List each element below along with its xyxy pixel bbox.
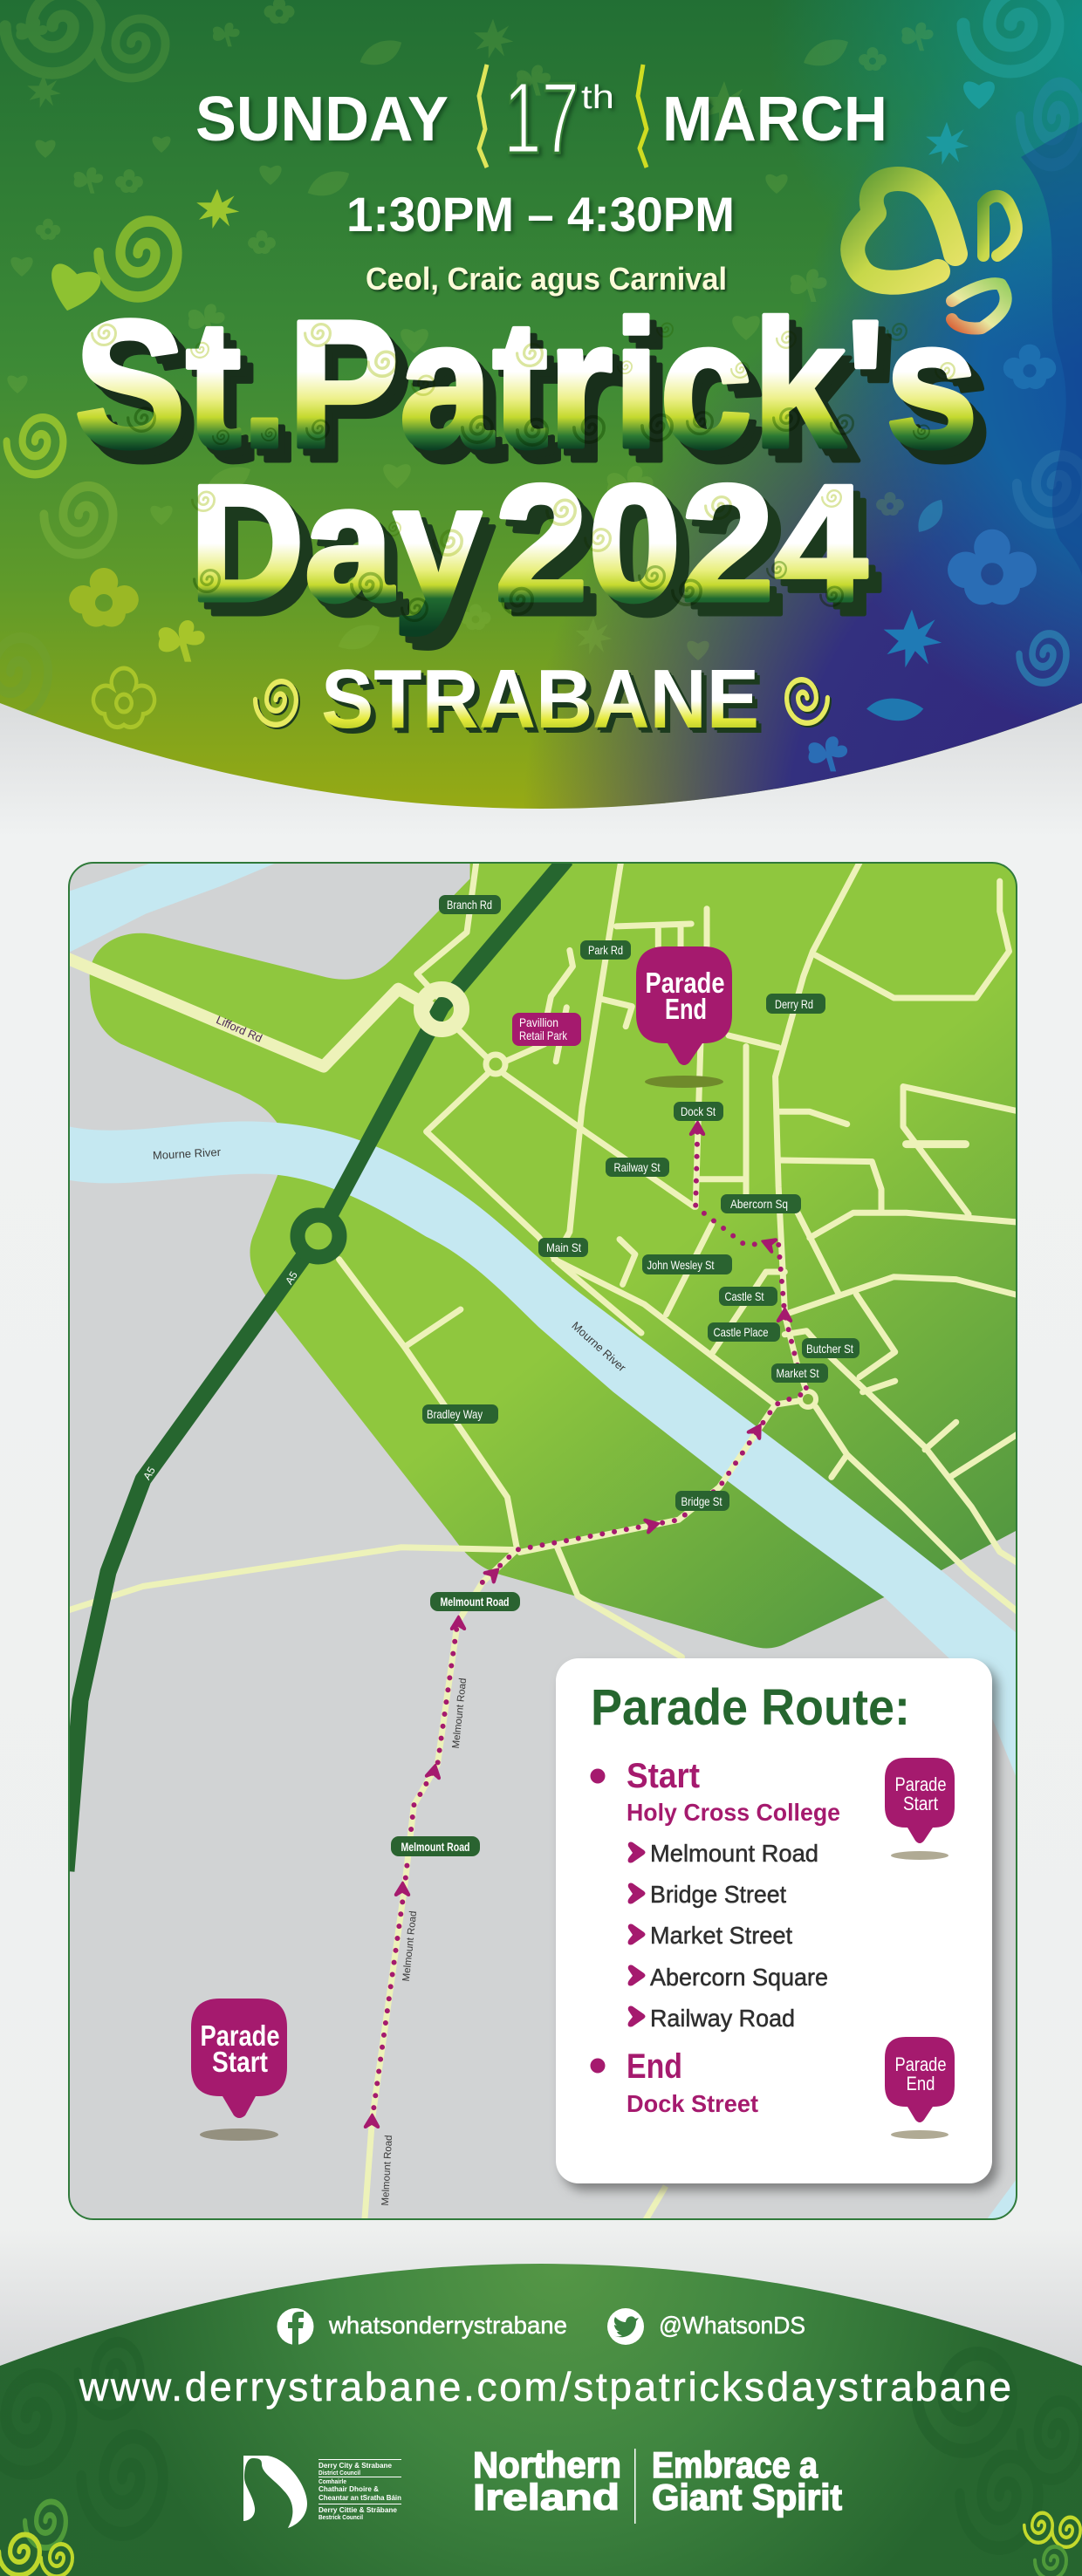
logo: Derry City and Strabane District Council: Comhairle bbox=[318, 2479, 346, 2485]
title: Strabane: STRABANE bbox=[321, 653, 759, 746]
Melmount Road labels: Melmount Road bbox=[451, 1677, 469, 1749]
faint festive pattern bbox=[5, 0, 934, 660]
logo: Northern Ireland: Ireland bbox=[473, 2477, 620, 2518]
website url: www.derrystrabane.com/stpatricksdaystrabane bbox=[79, 2364, 1011, 2409]
icon: twitter bbox=[607, 2308, 644, 2345]
swirls on title letters, lower green bbox=[128, 408, 929, 620]
title: Day 2024: 2024 bbox=[495, 451, 867, 636]
Parade End pin bbox=[636, 946, 732, 1088]
street name tags: John Wesley St bbox=[647, 1258, 715, 1272]
street name tags: Butcher St bbox=[806, 1342, 853, 1356]
parade route dotted line bbox=[372, 1131, 808, 2120]
street name tags: Castle St bbox=[724, 1289, 764, 1303]
Melmount Road labels bbox=[380, 1677, 469, 2206]
dark footer swirls bbox=[911, 2388, 926, 2429]
river labels: Mourne River bbox=[153, 1145, 222, 1162]
logo: Derry City and Strabane District Council bbox=[243, 2456, 401, 2528]
title: St. Patrick's: St.Patrick's bbox=[74, 284, 978, 486]
Pavillion Retail Park tag: Retail Park bbox=[519, 1028, 568, 1042]
route stops list: Railway Road bbox=[650, 2005, 795, 2032]
facebook handle: whatsonderrystrabane bbox=[328, 2312, 567, 2339]
decorative swirls and flowers bbox=[0, 0, 1082, 771]
legend pin: end: Parade bbox=[895, 2053, 946, 2075]
route stops list: Abercorn Square bbox=[650, 1964, 828, 1991]
Parade Start pin bbox=[191, 1999, 287, 2141]
route stops list: Market Street bbox=[650, 1922, 792, 1949]
street name tags: Abercorn Sq bbox=[730, 1197, 788, 1211]
start entry bbox=[590, 1757, 840, 1826]
Parade Start pin: Start bbox=[212, 2046, 268, 2078]
swirls on title letters, upper pale bbox=[92, 323, 955, 555]
logo: Embrace a Giant Spirit: Embrace a bbox=[652, 2444, 818, 2485]
zigzag divider left bbox=[479, 65, 487, 167]
logo: Derry City and Strabane District Council: Chathair Dhoire & bbox=[318, 2485, 379, 2493]
street name tags: Melmount Road bbox=[401, 1840, 469, 1854]
street name tags: Dock St bbox=[681, 1104, 716, 1118]
footer banner bbox=[0, 2264, 1082, 2576]
Pavillion Retail Park tag: Pavillion bbox=[519, 1015, 558, 1029]
date line: Sunday 17th March: MARCH bbox=[662, 85, 887, 154]
title: Day 2024: Day bbox=[189, 451, 482, 636]
route stops list: Bridge Street bbox=[650, 1881, 786, 1908]
end entry bbox=[590, 2047, 758, 2117]
A5 labels bbox=[140, 1269, 300, 1482]
street name tags: Melmount Road bbox=[440, 1595, 510, 1609]
legend heading: Parade Route: bbox=[591, 1679, 910, 1736]
logo: Embrace a Giant Spirit: Giant Spirit bbox=[652, 2477, 842, 2518]
Parade Start pin: Parade bbox=[201, 2019, 279, 2052]
end entry: Dock Street bbox=[627, 2090, 758, 2117]
logo: Northern Ireland: Northern bbox=[473, 2444, 621, 2485]
street name tags: Branch Rd bbox=[447, 898, 492, 912]
header banner bbox=[0, 0, 1082, 809]
legend pin: end: End bbox=[906, 2073, 935, 2094]
land and river areas bbox=[65, 863, 1024, 1798]
street name tags: Bradley Way bbox=[427, 1407, 483, 1421]
legend pin: start: Start bbox=[903, 1793, 938, 1814]
roundabout: Pavillion bbox=[486, 1055, 505, 1074]
end entry: End bbox=[627, 2047, 682, 2086]
swirl right of Strabane bbox=[787, 680, 827, 723]
street name tags: Main St bbox=[546, 1240, 581, 1254]
swirl left of Strabane bbox=[256, 681, 296, 725]
panel: parade route legend bbox=[556, 1658, 992, 2183]
legend pin: start: Parade bbox=[895, 1773, 946, 1795]
street name tags: Railway St bbox=[614, 1160, 661, 1174]
date line: Sunday 17th March: SUNDAY bbox=[195, 85, 449, 154]
date line: Sunday 17th March bbox=[195, 61, 887, 174]
river labels bbox=[153, 1145, 629, 1375]
heart butterfly bbox=[853, 179, 1017, 329]
date line: Sunday 17th March: 17 bbox=[503, 61, 579, 174]
tagline: Ceol, Craic agus Carnival bbox=[366, 261, 727, 297]
logo: Derry City and Strabane District Council: Derry Cittie & Strābane bbox=[318, 2506, 398, 2514]
panel: route map bbox=[65, 859, 1024, 2229]
map frame bbox=[69, 863, 1017, 2219]
Melmount Road labels: Melmount Road bbox=[380, 2135, 394, 2206]
zigzag divider right bbox=[638, 65, 647, 167]
street name tags: Park Rd bbox=[588, 943, 623, 957]
street name tags: Derry Rd bbox=[775, 997, 813, 1011]
twitter handle: @WhatsonDS bbox=[659, 2312, 805, 2339]
A5 labels: A5 bbox=[140, 1465, 158, 1482]
legend pin: end bbox=[885, 2037, 955, 2139]
logo: Derry City and Strabane District Council: Bestrick Council bbox=[318, 2515, 363, 2521]
time: 1:30PM – 4:30PM bbox=[346, 187, 735, 242]
route direction arrows bbox=[364, 1120, 792, 2128]
logo: Embrace a Giant Spirit bbox=[652, 2444, 842, 2518]
river labels: Mourne River bbox=[569, 1319, 629, 1375]
start entry: Holy Cross College bbox=[627, 1799, 840, 1826]
icon: facebook bbox=[277, 2308, 314, 2345]
Parade End pin: Parade bbox=[646, 967, 724, 999]
street name tags: Market St bbox=[777, 1366, 819, 1380]
route stops list bbox=[628, 1840, 828, 2032]
roundabout: Lifford bbox=[421, 989, 462, 1029]
legend pin: start bbox=[885, 1758, 955, 1860]
Parade End pin: End bbox=[665, 993, 707, 1025]
logo: Northern Ireland bbox=[473, 2444, 621, 2518]
logo: Derry City and Strabane District Council: District Council bbox=[318, 2470, 360, 2477]
street name tags bbox=[391, 895, 859, 1856]
A5 labels: A5 bbox=[283, 1269, 300, 1287]
street name tags: Castle Place bbox=[714, 1325, 769, 1339]
road labels on map: Lifford Rd bbox=[215, 1013, 264, 1045]
roundabout: Market St bbox=[800, 1391, 816, 1407]
logo: Derry City and Strabane District Council: Cheantar an tSratha Báin bbox=[318, 2494, 401, 2502]
road network bbox=[65, 863, 1024, 2229]
A5 dual carriageway bbox=[66, 859, 566, 1871]
route stops list: Melmount Road bbox=[650, 1840, 818, 1867]
Melmount Road labels: Melmount Road bbox=[401, 1910, 419, 1982]
Pavillion Retail Park tag bbox=[512, 1013, 581, 1046]
date line: Sunday 17th March: th bbox=[581, 79, 614, 116]
bright corner swirls bbox=[0, 2502, 1080, 2576]
street name tags: Bridge St bbox=[681, 1494, 722, 1508]
title: Day 2024 bbox=[189, 451, 867, 636]
logo: Derry City and Strabane District Council: Derry City & Strabane bbox=[318, 2462, 393, 2470]
roundabout: A5 bbox=[298, 1215, 339, 1257]
logo divider bbox=[634, 2449, 635, 2524]
start entry: Start bbox=[627, 1757, 700, 1795]
